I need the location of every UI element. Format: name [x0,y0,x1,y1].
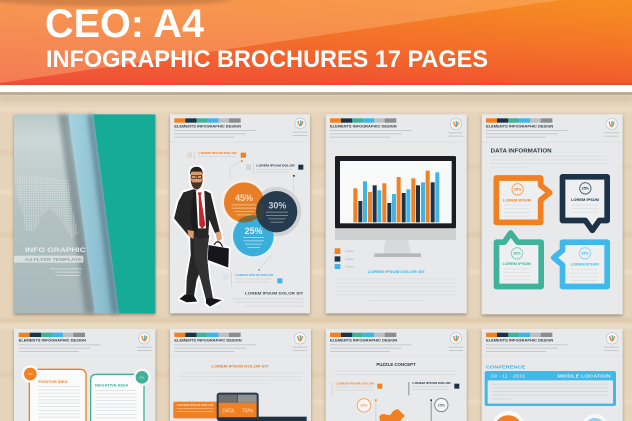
bubble: green [496,233,541,286]
phone and data tabs: DATA [222,409,235,415]
positive idea card [22,365,86,421]
page header: ELEMENTS INFOGRAPHIC DESIGN [19,338,86,343]
puzzle callouts and shape: LOREM IPSUM DOLOR [336,382,374,386]
page header: ELEMENTS INFOGRAPHIC DESIGN [486,338,553,343]
bubble: blue: 25% [581,252,589,256]
puzzle callouts and shape [332,381,459,421]
conference circles [493,411,607,421]
page header: ELEMENTS INFOGRAPHIC DESIGN [330,123,397,128]
bubble: navy [562,177,607,230]
page header [170,333,311,357]
positive idea card: POSITIVE IDEA [38,380,68,384]
conference date box: MIDDLE LOCATION [557,374,611,379]
page header: ELEMENTS INFOGRAPHIC DESIGN [330,338,397,343]
page header [326,118,467,142]
panel: bar chart page [326,114,467,313]
bubble: blue: LOREM IPSUM [571,263,599,267]
cover title: INFO GRAPHIC [25,248,87,254]
phone heading: LOREM IPSUM DOLOR SIT [211,363,269,368]
phone and data tabs [173,393,307,421]
negative idea card: NEGATIVE IDEA [95,384,129,388]
bubble: orange: 28% [514,188,522,192]
header banner [0,0,632,95]
conference heading: CONFERENCE [486,364,526,370]
venn circles: 45% [235,193,253,203]
panel: phone page [170,329,311,421]
phone and data tabs: 75% [242,409,253,415]
venn circles: 30% [268,201,286,211]
page header [14,333,155,357]
panel: conference page [482,329,623,421]
page header [482,333,623,357]
phone and data tabs: LOREM IPSUM DOLOR [177,403,213,407]
panel: circles page [170,114,310,313]
negative idea card [91,369,151,421]
bubble: orange [496,178,550,222]
negative idea card: 50% [140,377,144,379]
puzzle callouts and shape: LOREM IPSUM DOLOR [412,381,451,385]
puzzle callouts and shape: 25% [360,404,368,408]
positive idea card: 76% [28,374,33,376]
circle callouts [187,151,303,286]
bubble: green: LOREM IPSUM [503,262,531,266]
bubble: blue [554,242,607,286]
conference date box [485,371,616,406]
circle callouts: LOREM IPSUM DOLOR [198,151,238,155]
puzzle heading: PUZZLE CONCEPT [376,362,416,367]
venn circles [221,179,301,259]
page header: ELEMENTS INFOGRAPHIC DESIGN [486,123,553,128]
bubble: navy: LOREM IPSUM [571,198,599,202]
circle callouts: LOREM IPSUM DOLOR [256,163,296,167]
bubble: green: 28% [513,252,521,256]
circle callouts: LOREM IPSUM DOLOR [235,273,274,277]
conference date box: 09 · 11 · 2016 [491,374,526,379]
title: CEO: A4 [45,2,205,46]
businessman illustration [174,167,229,307]
footer text: LOREM IPSUM DOLOR SIT [245,291,304,296]
page header: ELEMENTS INFOGRAPHIC DESIGN [174,338,242,343]
panel: positive and negative idea page [14,329,155,421]
page header [482,118,623,142]
panel: speech bubbles page [482,114,623,314]
subtitle: INFOGRAPHIC BROCHURES 17 PAGES [46,46,488,73]
page header [170,118,310,142]
chart caption: LOREM IPSUM DOLOR SIT [368,269,426,274]
bubble: orange: LOREM IPSUM [503,198,531,202]
bars [353,171,430,222]
chart legend [335,248,354,269]
page header [326,333,467,357]
bubble: navy: 25% [582,187,590,191]
world map [15,175,78,238]
panel: cover page [14,114,155,313]
panel: puzzle concept page [326,329,467,421]
venn circles: 25% [245,226,263,236]
page header: ELEMENTS INFOGRAPHIC DESIGN [174,123,241,128]
monitor with bar chart [335,156,456,257]
puzzle callouts and shape: 25% [438,403,446,407]
panel: cover page: A4 FLYER TEMPLATE [25,257,82,262]
data heading: DATA INFORMATION [491,148,552,154]
